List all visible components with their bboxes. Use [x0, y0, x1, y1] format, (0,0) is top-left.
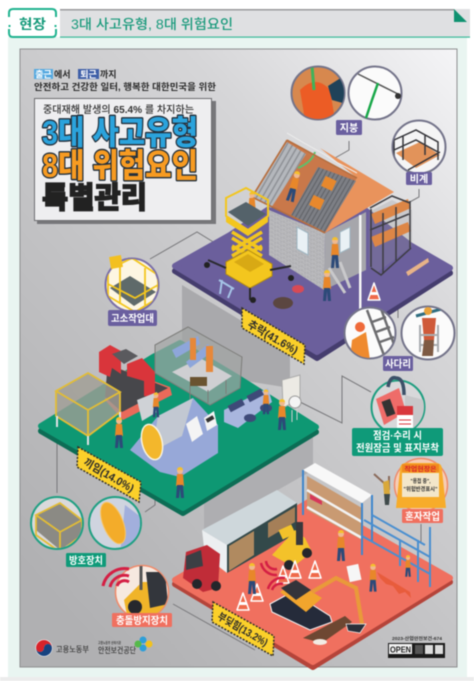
notice board: 작업현장은	[404, 464, 437, 473]
label: 혼자작업: 혼자작업	[405, 510, 440, 523]
cones	[237, 561, 321, 610]
intro line: 안전하고 건강한 일터, 행복한 대한민국을 위한	[34, 81, 217, 92]
shelving	[303, 463, 430, 587]
logo: KOSHA: 안전보건공단	[98, 645, 137, 655]
callout: guards	[31, 497, 145, 567]
house roof	[252, 133, 394, 233]
truck	[183, 490, 297, 592]
notice board	[396, 463, 446, 508]
label: 방호장치: 방호장치	[69, 554, 103, 567]
callout: lockout tagout	[352, 378, 443, 456]
panel and notice	[282, 375, 301, 422]
license info	[388, 635, 445, 658]
commute badges: 퇴근	[80, 70, 97, 80]
control desks	[224, 388, 272, 428]
rubble	[273, 297, 293, 309]
open license badge: OPEN	[390, 644, 411, 654]
header bar	[60, 9, 470, 38]
tag: 추락: 추락(41.6%)	[245, 318, 301, 357]
white guide line	[359, 215, 362, 310]
label: 지붕: 지붕	[340, 122, 358, 134]
callout: scaffold	[392, 120, 446, 186]
danger tag	[397, 406, 413, 428]
conveyor	[99, 345, 172, 421]
connector lines	[57, 141, 421, 650]
barriers	[377, 572, 411, 598]
notice board: "용접 중",	[410, 477, 431, 485]
cone	[368, 283, 380, 300]
warehouse workers	[248, 530, 411, 594]
clover mark	[134, 636, 152, 652]
tag: 부딪힘: 부딪힘(13.2%)	[215, 610, 270, 649]
title lead line: 중대재해 발생의 65.4% 를 차지하는	[43, 103, 194, 116]
tag: 끼임: 끼임(14.0%)	[81, 455, 137, 495]
tag: 끼임	[77, 447, 141, 502]
header tag: 현장	[8, 9, 56, 37]
header corner triangle	[454, 9, 467, 22]
header title: 3대 사고유형, 8대 위험요인	[71, 17, 233, 32]
commute badges: 출근	[35, 70, 52, 80]
label: 고소작업대: 고소작업대	[111, 312, 154, 325]
ladder circle 1	[344, 306, 396, 360]
plank	[406, 258, 429, 276]
label: lockout	[352, 428, 443, 456]
wifi marks	[261, 561, 285, 590]
label: lockout: 점검·수리 시	[373, 430, 422, 442]
label: 사다리: 사다리	[385, 358, 411, 370]
label: 비계: 비계	[410, 172, 428, 186]
platform: caught-in zone	[41, 327, 316, 513]
callout: working alone	[374, 458, 448, 523]
support columns	[182, 285, 313, 532]
header tag: 현장: 현장	[19, 17, 47, 32]
logo: KOSHA: 고용노동부 산하기관	[98, 640, 122, 645]
warning sign board	[346, 564, 362, 582]
platform: collision zone	[175, 463, 450, 667]
tag: 추락	[242, 308, 305, 364]
commute badges: 까지	[100, 68, 117, 80]
notice board: "위험반경표시"	[404, 485, 438, 493]
guard circle 2	[89, 497, 145, 555]
title line 3: 특별관리	[42, 182, 147, 215]
guard circle 1	[31, 497, 83, 552]
title card	[34, 98, 216, 224]
intro text	[34, 68, 217, 92]
safety cage	[56, 373, 120, 445]
title line 1: 3대 사고유형	[42, 114, 198, 151]
callout: roof harness	[292, 66, 402, 135]
scissor lift	[204, 188, 294, 303]
page bottom strip	[0, 677, 474, 681]
machine workers	[115, 389, 286, 498]
logo: ministry	[36, 640, 89, 656]
roof detail circle 1	[292, 66, 350, 120]
header	[8, 9, 470, 38]
callout: aerial work platform	[106, 255, 158, 326]
ladder	[329, 262, 350, 293]
excavated trench	[303, 616, 352, 645]
robot cell	[155, 327, 242, 405]
forklift on platform	[272, 522, 312, 570]
lone worker figure	[374, 474, 390, 505]
house walls	[269, 210, 366, 290]
callout: collision prevention	[103, 565, 172, 627]
label: lockout: 전원잠금 및 표지부착	[356, 442, 439, 454]
label: 충돌방지장치: 충돌방지장치	[116, 614, 168, 627]
roof workers	[248, 170, 339, 301]
logo: KOSHA	[98, 636, 152, 655]
callout: ladder	[344, 306, 454, 371]
taegeuk mark	[36, 640, 52, 656]
lathe	[130, 398, 218, 477]
logo: ministry: 고용노동부	[56, 645, 89, 654]
license info: 2023-산업안전보건-674	[392, 635, 443, 641]
title line 2: 8대 위험요인	[42, 147, 198, 184]
platform: roof and fall zone	[175, 133, 450, 358]
scaffold	[369, 196, 412, 275]
roof detail circle 2	[348, 66, 402, 120]
sensor waves	[103, 569, 129, 587]
commute badges: 에서	[54, 68, 71, 80]
excavator	[270, 578, 366, 633]
hurdles	[219, 280, 234, 298]
ladder circle 2	[402, 306, 454, 360]
commute badges	[34, 68, 117, 80]
